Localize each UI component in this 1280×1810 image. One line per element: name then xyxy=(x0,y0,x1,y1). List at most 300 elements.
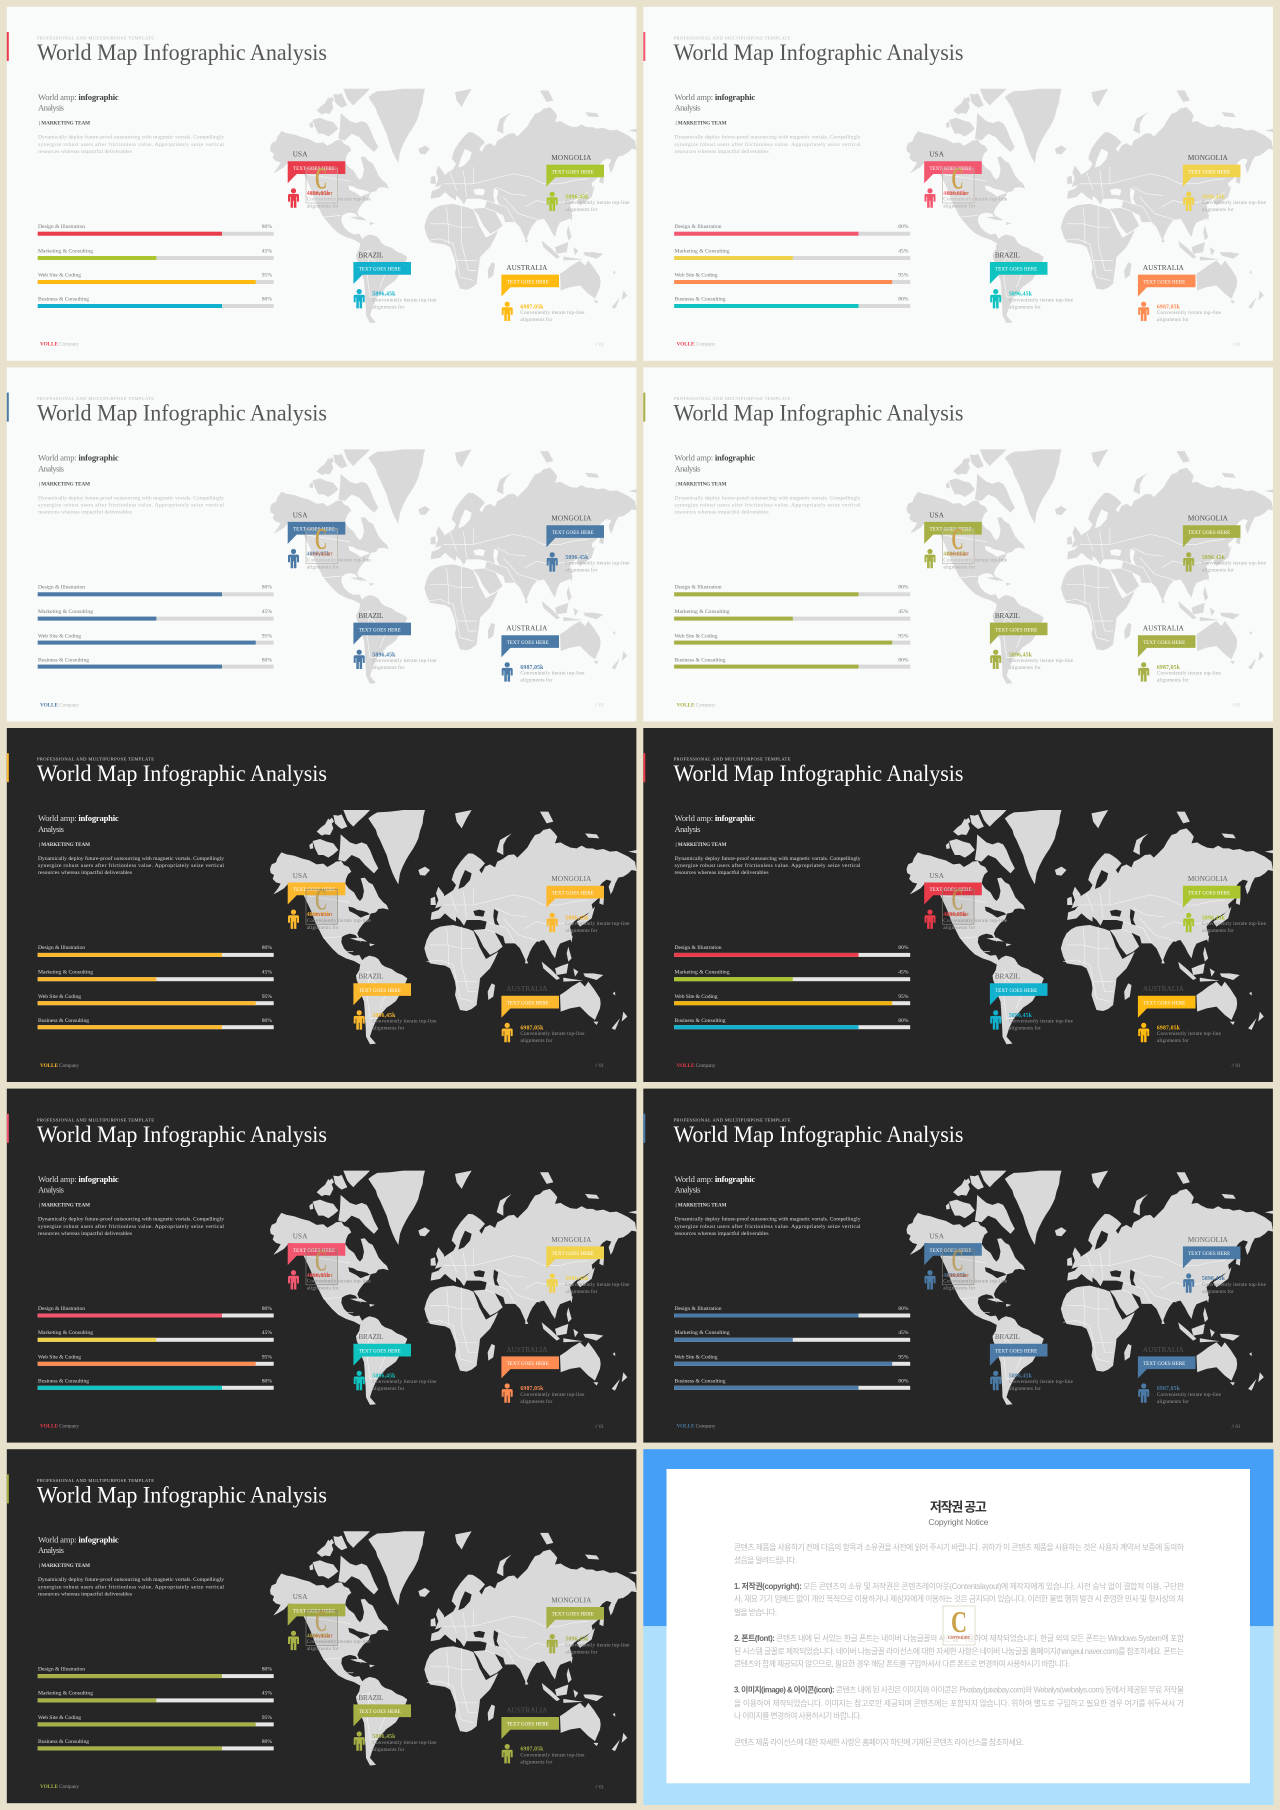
callout: Australia: alignments for xyxy=(1157,1398,1189,1405)
callout: Mongolia: MONGOLIA xyxy=(1188,875,1229,883)
callout: USA: TEXT GOES HERE xyxy=(293,167,335,172)
footer xyxy=(40,702,605,709)
panel: light slide, olive xyxy=(643,367,1273,721)
bar: design xyxy=(674,1306,910,1318)
bar: business: Business & Consulting xyxy=(674,657,726,663)
bar: marketing: Marketing & Consulting xyxy=(38,970,93,976)
world map xyxy=(270,1531,637,1766)
panel: copyright notice xyxy=(643,1449,1274,1805)
callout: Australia: 6987,05k xyxy=(1157,1026,1181,1032)
watermark: COPYRIGHT xyxy=(948,1635,970,1640)
callout: Australia: 6987,05k xyxy=(520,1747,544,1753)
callout: USA: 4896,05k xyxy=(307,1273,330,1279)
callout: USA: TEXT GOES HERE xyxy=(930,1249,972,1254)
bar: marketing: 45% xyxy=(262,609,272,615)
callout: Australia: Conveniently iterate top-line xyxy=(520,1392,585,1398)
callout: Brazil: 5896,45k xyxy=(372,652,396,658)
paragraph: resources whereas impactful deliverables xyxy=(674,509,768,516)
callout: Mongolia: 5896,45k xyxy=(1202,555,1226,561)
callout: USA: alignments for xyxy=(943,1285,975,1292)
subheading: Analysis xyxy=(38,103,65,113)
callout: Brazil xyxy=(353,1694,437,1753)
callout: USA xyxy=(924,1232,1008,1292)
callout: Brazil: Conveniently iterate top-line xyxy=(1009,658,1074,664)
callout: Brazil: alignments for xyxy=(372,664,405,671)
watermark: C xyxy=(952,521,964,556)
bar: web: Web Site & Coding xyxy=(38,633,81,639)
bar: web: 95% xyxy=(898,1355,909,1361)
footer: VOLLE Company xyxy=(40,1063,79,1069)
accent tab xyxy=(7,1474,9,1503)
callout: Australia: alignments for xyxy=(520,677,553,684)
callout: Brazil: TEXT GOES HERE xyxy=(995,628,1037,633)
paragraph: synergize robust users after frictionless value. Appropriately seize vertical xyxy=(38,1583,224,1590)
callout: Australia: AUSTRALIA xyxy=(1143,985,1185,993)
world map xyxy=(270,1171,637,1405)
callout: Mongolia xyxy=(1183,1236,1267,1295)
callout: Australia: AUSTRALIA xyxy=(506,985,548,993)
bar: web: 95% xyxy=(898,994,909,1000)
bar: business xyxy=(674,297,910,308)
watermark: C xyxy=(315,160,327,196)
paragraph: synergize robust users after frictionless value. Appropriately seize vertical xyxy=(674,141,861,148)
team label: | MARKETING TEAM xyxy=(676,842,727,848)
callout: Mongolia xyxy=(546,515,630,574)
callout: Mongolia: Conveniently iterate top-line xyxy=(565,1282,630,1288)
accent tab xyxy=(643,1114,645,1143)
panel: dark slide, multicolor red xyxy=(643,728,1273,1082)
subheading: Analysis xyxy=(674,103,701,113)
callout: USA: 4896,05k xyxy=(943,912,967,918)
paragraph xyxy=(674,134,861,155)
bar: web: Web Site & Coding xyxy=(674,994,718,1000)
callout: Brazil xyxy=(990,973,1074,1032)
callout: Mongolia: TEXT GOES HERE xyxy=(552,892,594,897)
callout: Mongolia: MONGOLIA xyxy=(551,154,592,162)
bar: marketing xyxy=(674,970,910,981)
bar: web: 95% xyxy=(262,994,272,1000)
watermark: C xyxy=(315,1242,327,1277)
subheading xyxy=(674,813,755,834)
callout: Australia xyxy=(1138,985,1222,1044)
callout: Brazil: 5896,45k xyxy=(1009,1374,1033,1380)
bar: business: Business & Consulting xyxy=(38,1018,89,1024)
callout: USA: USA xyxy=(293,872,308,880)
callout: Brazil: BRAZIL xyxy=(995,612,1020,620)
callout: USA: USA xyxy=(293,1593,308,1601)
callout: USA: USA xyxy=(929,151,945,159)
title: World Map Infographic Analysis xyxy=(674,401,964,426)
title: World Map Infographic Analysis xyxy=(674,1122,964,1147)
bar: business: Business & Consulting xyxy=(38,297,89,303)
notice heading: 저작권 공고 xyxy=(930,1500,987,1515)
bar: business: 80% xyxy=(898,1379,909,1385)
bar: marketing xyxy=(674,248,910,260)
world map xyxy=(270,449,637,684)
paragraph: Dynamically deploy future-proof outsourcing with magnetic vortals. Compellingly xyxy=(674,1216,861,1223)
watermark: COPYRIGHT xyxy=(310,191,333,196)
watermark xyxy=(942,160,974,203)
footer: // 01 xyxy=(595,1064,605,1069)
panel: light slide, blue xyxy=(7,367,637,721)
callout: Brazil: BRAZIL xyxy=(358,1694,383,1702)
callout: USA: 4896,05k xyxy=(307,912,330,918)
callout: Australia xyxy=(1138,625,1222,684)
bar: design: Design & Illustration xyxy=(674,585,722,591)
callout: Mongolia xyxy=(1183,154,1267,213)
callout: Brazil: Conveniently iterate top-line xyxy=(372,1740,437,1746)
bar: design xyxy=(38,1306,274,1318)
callout: Brazil: BRAZIL xyxy=(358,612,383,620)
callout: Australia xyxy=(1138,264,1222,323)
bar: business xyxy=(674,657,910,669)
callout: Australia: alignments for xyxy=(520,1398,553,1405)
bar: marketing: 45% xyxy=(262,970,272,976)
bar: marketing: 45% xyxy=(898,1330,909,1336)
footer: VOLLE Company xyxy=(40,342,79,348)
watermark: C xyxy=(952,160,964,196)
callout: USA: Conveniently iterate top-line xyxy=(943,557,1008,563)
bar: business xyxy=(674,1018,910,1029)
notice card xyxy=(666,1469,1250,1783)
world map xyxy=(906,89,1273,323)
bar: design: 80% xyxy=(262,945,272,951)
subheading xyxy=(38,453,119,473)
paragraph: synergize robust users after frictionless value. Appropriately seize vertical xyxy=(38,141,224,148)
paragraph: resources whereas impactful deliverables xyxy=(38,148,132,155)
bar: marketing: 45% xyxy=(898,609,909,615)
callout: USA: TEXT GOES HERE xyxy=(293,528,335,533)
callout: Mongolia: 5896,45k xyxy=(1202,916,1226,922)
bar: design xyxy=(38,224,274,236)
footer: VOLLE Company xyxy=(40,1424,79,1430)
callout: Australia: TEXT GOES HERE xyxy=(507,280,549,285)
paragraph xyxy=(674,1216,861,1237)
callout: Brazil: 5896,45k xyxy=(372,1374,396,1380)
bar: web xyxy=(674,633,910,645)
notice section: image xyxy=(734,1685,1184,1721)
watermark xyxy=(942,882,974,924)
callout: Australia xyxy=(501,1706,585,1765)
callout: Australia: TEXT GOES HERE xyxy=(507,641,549,646)
paragraph: resources whereas impactful deliverables xyxy=(38,1230,132,1237)
bar: web: 95% xyxy=(262,1715,272,1721)
callout: Australia: TEXT GOES HERE xyxy=(507,1723,549,1728)
callout: Brazil: alignments for xyxy=(372,1025,405,1032)
bar: business: 80% xyxy=(898,657,909,663)
bar: business: 80% xyxy=(262,297,272,303)
callout: USA: 4896,05k xyxy=(943,191,967,197)
watermark xyxy=(942,521,974,564)
watermark xyxy=(943,1604,975,1645)
bar: design xyxy=(674,224,910,236)
bar: marketing: Marketing & Consulting xyxy=(38,1330,93,1336)
callout: Brazil: alignments for xyxy=(1009,303,1041,310)
watermark: COPYRIGHT xyxy=(947,912,969,917)
callout: Brazil: alignments for xyxy=(372,303,405,310)
bar: design xyxy=(674,585,910,596)
notice intro: 콘텐츠 제품을 사용하기 전에 다음의 항목과 소유권을 사전에 읽어 주시기 바랍니다. 귀하가 이 콘텐츠 제품을 사용하는 것은 사용자 계약서 보증에 동의하 xyxy=(734,1542,1184,1552)
paragraph: resources whereas impactful deliverables xyxy=(674,869,768,876)
bar chart xyxy=(38,224,274,308)
watermark: C xyxy=(952,882,964,917)
callout: Australia: 6987,05k xyxy=(520,1026,544,1032)
callout: Mongolia xyxy=(1183,515,1267,574)
callout: USA: 4896,05k xyxy=(307,552,330,558)
kicker: PROFESSIONAL AND MULTIPURPOSE TEMPLATE xyxy=(37,757,154,762)
callout: Brazil: Conveniently iterate top-line xyxy=(372,658,437,664)
callout: USA xyxy=(288,151,371,210)
bar: business: Business & Consulting xyxy=(38,657,89,663)
callout: Mongolia: 5896,45k xyxy=(565,194,589,200)
subheading: World amp: infographic xyxy=(674,1174,755,1184)
callout: Brazil: TEXT GOES HERE xyxy=(995,268,1037,273)
world map xyxy=(906,810,1273,1044)
bar: web: Web Site & Coding xyxy=(674,273,718,279)
callout: USA: USA xyxy=(929,511,945,519)
callout: Mongolia: Conveniently iterate top-line xyxy=(1202,200,1267,206)
bar: marketing xyxy=(674,609,910,621)
watermark: C xyxy=(315,882,327,917)
bar: design: 80% xyxy=(898,224,909,230)
callout: Australia: TEXT GOES HERE xyxy=(507,1002,549,1007)
callout: Brazil: Conveniently iterate top-line xyxy=(372,1019,437,1025)
callout: Australia: Conveniently iterate top-line xyxy=(520,310,585,316)
kicker: PROFESSIONAL AND MULTIPURPOSE TEMPLATE xyxy=(674,1117,791,1122)
watermark: C xyxy=(952,1242,964,1277)
bar: design: Design & Illustration xyxy=(674,1306,722,1312)
bar: web: 95% xyxy=(262,273,272,279)
callout: Mongolia: 5896,45k xyxy=(565,916,589,922)
callout: Mongolia: MONGOLIA xyxy=(1188,1236,1229,1244)
panel: light slide, multicolor pink xyxy=(643,7,1273,361)
subheading: Analysis xyxy=(674,463,701,473)
callout: Australia: TEXT GOES HERE xyxy=(1143,641,1185,646)
bar: design: Design & Illustration xyxy=(38,585,85,591)
footer: // 01 xyxy=(595,343,605,348)
title: World Map Infographic Analysis xyxy=(37,1122,327,1147)
title: World Map Infographic Analysis xyxy=(37,40,327,65)
subheading: Analysis xyxy=(38,1185,65,1195)
accent tab xyxy=(7,32,9,61)
bar: web: Web Site & Coding xyxy=(674,1355,718,1361)
bar: design: 80% xyxy=(262,585,272,591)
callout: USA: alignments for xyxy=(307,203,339,210)
subheading xyxy=(674,92,755,113)
bar: business: 80% xyxy=(898,1018,909,1024)
callout: Australia: AUSTRALIA xyxy=(506,1706,548,1714)
callout: USA: USA xyxy=(293,151,308,159)
callout: USA: USA xyxy=(929,1233,945,1241)
callout: Mongolia: alignments for xyxy=(565,1288,598,1295)
callout: Australia: Conveniently iterate top-line xyxy=(1157,1392,1222,1398)
callout: Brazil: Conveniently iterate top-line xyxy=(1009,1379,1074,1385)
subheading: World amp: infographic xyxy=(674,92,755,102)
callout: USA: Conveniently iterate top-line xyxy=(943,918,1008,924)
notice section: copyright: 사, 재요 기기 임베드 없이 개인 목적으로 이용하거나 제삼자에게 이용하는 것은 금지되어 있습니다. 이러한 불법 행위 발견 시 준엄한 민사 및 형사상의 처 xyxy=(734,1594,1184,1604)
paragraph xyxy=(38,494,224,516)
bar: business: Business & Consulting xyxy=(674,297,726,303)
world map xyxy=(270,89,637,323)
footer xyxy=(40,1784,605,1790)
callout: Australia: Conveniently iterate top-line xyxy=(520,671,585,677)
watermark: COPYRIGHT xyxy=(947,1273,969,1278)
footer: // 01 xyxy=(1232,704,1241,709)
callout: Mongolia xyxy=(546,154,630,213)
bar: web: 95% xyxy=(262,633,272,639)
paragraph: resources whereas impactful deliverables xyxy=(674,148,768,155)
callout: Australia: AUSTRALIA xyxy=(506,1346,548,1354)
callout: USA: TEXT GOES HERE xyxy=(293,1609,335,1614)
title: World Map Infographic Analysis xyxy=(37,761,327,786)
notice section: font: 2. 폰트(font): 콘텐츠 내에 된 서있는 한글 폰트는 네이버 나눔글꼴의 사본을 이용하여 제작되었습니다. 한글 외의 모든 폰트는 Windows System에 포함 xyxy=(734,1633,1184,1643)
callout: Australia: 6987,05k xyxy=(1157,665,1181,671)
bar: design: Design & Illustration xyxy=(38,1306,85,1312)
footer: // 01 xyxy=(595,1425,605,1430)
callout: USA: Conveniently iterate top-line xyxy=(307,197,371,203)
accent tab xyxy=(7,393,9,422)
bar: marketing: Marketing & Consulting xyxy=(674,1330,730,1336)
subheading xyxy=(38,92,119,113)
footer: VOLLE Company xyxy=(676,1424,716,1430)
footer: // 01 xyxy=(1232,1425,1241,1430)
callout: Mongolia: TEXT GOES HERE xyxy=(552,531,594,536)
notice section: image: 을 이용하여 제작되었습니다. 이미지는 참고로만 제공되며 콘텐츠에는 포함되지 않습니다. 위하여 별도로 구입하고 필요한 경우 여기를 쉬두셔서 거 xyxy=(734,1698,1184,1708)
callout: Australia: AUSTRALIA xyxy=(1143,264,1185,272)
paragraph xyxy=(38,1576,224,1597)
callout: Mongolia: TEXT GOES HERE xyxy=(1188,1252,1230,1257)
bar: design xyxy=(38,1666,274,1678)
footer: VOLLE Company xyxy=(676,342,716,348)
callout: Australia: alignments for xyxy=(520,1037,553,1044)
subheading: World amp: infographic xyxy=(38,1534,119,1544)
callout: USA: TEXT GOES HERE xyxy=(293,1249,335,1254)
callout: Brazil: TEXT GOES HERE xyxy=(359,1350,401,1355)
bar: business xyxy=(38,1378,274,1390)
callout: Mongolia: 5896,45k xyxy=(1202,1276,1226,1282)
bar: design: Design & Illustration xyxy=(38,945,85,951)
watermark: COPYRIGHT xyxy=(947,552,969,557)
bar: business: Business & Consulting xyxy=(674,1379,726,1385)
kicker: PROFESSIONAL AND MULTIPURPOSE TEMPLATE xyxy=(674,396,791,401)
notice intro xyxy=(734,1542,1184,1565)
bar: design: Design & Illustration xyxy=(674,224,722,230)
bar: web xyxy=(674,994,910,1005)
watermark: COPYRIGHT xyxy=(310,1633,333,1638)
footer xyxy=(676,702,1241,709)
bar: marketing xyxy=(38,248,274,260)
footer xyxy=(40,1424,605,1430)
bar: marketing: 45% xyxy=(262,1330,272,1336)
bar: design xyxy=(674,945,910,957)
callout: Australia xyxy=(501,264,585,323)
subheading: World amp: infographic xyxy=(38,453,119,463)
callout: Brazil: TEXT GOES HERE xyxy=(359,268,401,273)
callout: Brazil: BRAZIL xyxy=(358,973,383,981)
team label: | MARKETING TEAM xyxy=(676,481,727,487)
callout: Brazil xyxy=(353,973,437,1032)
paragraph: Dynamically deploy future-proof outsourcing with magnetic vortals. Compellingly xyxy=(674,134,861,141)
callout: Brazil xyxy=(353,251,437,310)
callout: Australia xyxy=(501,625,585,684)
world map xyxy=(906,449,1273,684)
paragraph xyxy=(674,494,861,516)
bar: web xyxy=(38,1354,274,1366)
bar: web: 95% xyxy=(898,273,909,279)
callout: USA: Conveniently iterate top-line xyxy=(307,557,371,563)
paragraph: Dynamically deploy future-proof outsourcing with magnetic vortals. Compellingly xyxy=(38,494,224,501)
callout: Australia: Conveniently iterate top-line xyxy=(1157,310,1222,316)
bar: design: Design & Illustration xyxy=(38,224,85,230)
accent tab xyxy=(643,393,645,422)
notice subheading: Copyright Notice xyxy=(928,1517,989,1527)
bar: design: 80% xyxy=(262,1306,272,1312)
callout: Australia: 6987,05k xyxy=(1157,1386,1181,1392)
callout: Brazil: 5896,45k xyxy=(1009,1013,1033,1019)
notice section: copyright: 벌을 받습니다. xyxy=(734,1607,777,1617)
bar: marketing: Marketing & Consulting xyxy=(674,248,730,254)
callout: USA: 4896,05k xyxy=(943,1273,967,1279)
bar: marketing xyxy=(38,970,274,981)
callout: Brazil: BRAZIL xyxy=(995,251,1020,259)
callout: Brazil: alignments for xyxy=(1009,664,1041,671)
callout: Australia: 6987,05k xyxy=(1157,304,1181,310)
team label: | MARKETING TEAM xyxy=(676,121,727,127)
callout: Australia: 6987,05k xyxy=(520,1386,544,1392)
footer: // 01 xyxy=(1232,343,1241,348)
callout: USA: alignments for xyxy=(307,1285,339,1292)
bar: marketing xyxy=(38,609,274,621)
callout: Mongolia: MONGOLIA xyxy=(551,515,592,523)
callout: Australia: AUSTRALIA xyxy=(506,625,548,633)
footer: // 01 xyxy=(1232,1064,1241,1069)
subheading: Analysis xyxy=(674,824,701,834)
callout: Mongolia: TEXT GOES HERE xyxy=(1188,170,1230,175)
callout: Mongolia: Conveniently iterate top-line xyxy=(1202,921,1267,927)
team label: | MARKETING TEAM xyxy=(676,1203,727,1209)
paragraph: synergize robust users after frictionless value. Appropriately seize vertical xyxy=(38,862,224,869)
callout: Brazil xyxy=(990,1333,1074,1392)
subheading xyxy=(38,813,119,834)
bar: business: Business & Consulting xyxy=(38,1739,89,1745)
callout: Australia: alignments for xyxy=(520,316,553,323)
notice closing: 콘텐츠 제품 라이선스에 대한 자세한 사항은 홈페이지 하단에 기재된 콘텐츠 라이선스를 참조하세요. xyxy=(734,1737,1024,1747)
bar: business xyxy=(38,1018,274,1029)
accent tab xyxy=(7,753,9,782)
notice section: font xyxy=(734,1633,1184,1669)
kicker: PROFESSIONAL AND MULTIPURPOSE TEMPLATE xyxy=(37,396,154,401)
callout: Brazil: TEXT GOES HERE xyxy=(359,628,401,633)
panel: dark slide, amber xyxy=(7,728,637,1082)
bar: marketing xyxy=(674,1330,910,1342)
title: World Map Infographic Analysis xyxy=(674,761,964,786)
bar: design: Design & Illustration xyxy=(674,945,722,951)
watermark xyxy=(306,160,338,203)
bar: design: Design & Illustration xyxy=(38,1666,85,1672)
callout: Australia: TEXT GOES HERE xyxy=(1143,280,1185,285)
callout: Mongolia: Conveniently iterate top-line xyxy=(565,200,630,206)
bar: web: Web Site & Coding xyxy=(38,994,81,1000)
bar: design xyxy=(38,945,274,957)
bar: business: 80% xyxy=(898,297,909,303)
footer: VOLLE Company xyxy=(40,702,79,708)
callout: Brazil xyxy=(353,612,437,671)
bar: web xyxy=(38,1715,274,1726)
bar: design: 80% xyxy=(898,945,909,951)
team label: | MARKETING TEAM xyxy=(39,1563,90,1569)
bar chart xyxy=(38,1666,274,1750)
notice section: font: 된 시스템 글꼴로 제작되었습니다. 네이버 나눔글꼴 라이선스에 대한 자세한 사항은 네이버 나눔글꼴 홈페이지(hangeul.naver.com)를 참조하세요. 폰트는 xyxy=(734,1646,1184,1656)
